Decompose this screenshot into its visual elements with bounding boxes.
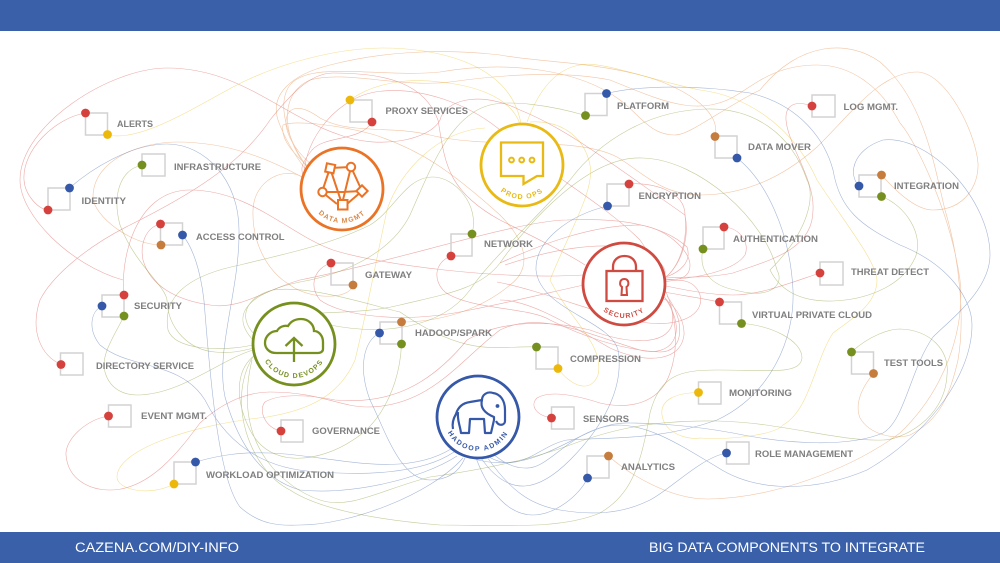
node: network [447, 230, 533, 260]
node: integration [855, 171, 959, 201]
hub: hadoop admin: HADOOP ADMIN [448, 430, 508, 451]
node: event management: EVENT MGMT. [141, 411, 207, 422]
node: virtual private cloud: VIRTUAL PRIVATE CLOUD [752, 310, 872, 321]
hub: cloud devops [252, 302, 336, 386]
node: role management [722, 442, 853, 464]
hub: data mgmt: DATA MGMT [318, 210, 364, 224]
node: gateway: GATEWAY [365, 270, 413, 281]
node: platform: PLATFORM [617, 101, 669, 112]
node: sensors [547, 407, 629, 429]
node: proxy services: PROXY SERVICES [386, 106, 468, 117]
node: identity: IDENTITY [82, 196, 127, 207]
orange connectors to data management hub [93, 48, 978, 499]
node: alerts [81, 109, 153, 139]
footer banner [0, 532, 1000, 563]
hub: security [582, 242, 666, 326]
footer banner: BIG DATA COMPONENTS TO INTEGRATE [649, 540, 925, 555]
node: integration: INTEGRATION [894, 181, 959, 192]
node: sensors: SENSORS [583, 414, 629, 425]
node: event management [104, 405, 207, 427]
node: compression: COMPRESSION [570, 354, 641, 365]
node: infrastructure [138, 154, 261, 176]
red connectors to security hub [20, 68, 820, 490]
node: hadoop/spark [375, 318, 492, 348]
node: workload optimization: WORKLOAD OPTIMIZATION [206, 470, 334, 481]
node: access control [156, 220, 285, 249]
node: workload optimization [170, 458, 334, 488]
node: infrastructure: INFRASTRUCTURE [174, 162, 261, 173]
node: log management: LOG MGMT. [844, 102, 898, 113]
node: proxy services [346, 96, 468, 126]
node: monitoring: MONITORING [729, 388, 792, 399]
node: security (left): SECURITY [134, 301, 183, 312]
node: security (left) [98, 291, 183, 320]
hub: hadoop admin [436, 374, 520, 460]
node: encryption [603, 180, 701, 210]
node: governance [277, 420, 380, 442]
node: platform [581, 89, 669, 120]
node: threat detect [816, 262, 929, 285]
olive connectors to cloud devops hub [104, 103, 947, 526]
top banner [0, 0, 1000, 31]
node: access control: ACCESS CONTROL [196, 232, 285, 243]
node: threat detect: THREAT DETECT [851, 267, 929, 278]
node: identity [44, 184, 127, 214]
node: governance: GOVERNANCE [312, 426, 380, 437]
node: compression [532, 343, 641, 373]
hub: data mgmt [300, 146, 384, 232]
node: test tools: TEST TOOLS [884, 358, 943, 369]
node: directory service [57, 353, 194, 375]
node: role management: ROLE MANAGEMENT [755, 449, 853, 460]
node: data mover [711, 132, 811, 162]
node: network: NETWORK [484, 239, 533, 250]
node: analytics [583, 452, 675, 482]
blue connectors to hadoop admin hub [70, 87, 990, 525]
node: log management [808, 95, 898, 117]
node: monitoring [694, 382, 792, 404]
node: directory service: DIRECTORY SERVICE [96, 361, 194, 372]
yellow connectors to prod ops hub [108, 48, 877, 491]
footer banner: CAZENA.COM/DIY-INFO [75, 540, 239, 555]
hub: prod ops: PROD OPS [500, 188, 542, 199]
node: encryption: ENCRYPTION [638, 191, 701, 202]
hub: security: SECURITY [604, 308, 642, 318]
node: gateway [327, 259, 413, 289]
node: hadoop/spark: HADOOP/SPARK [415, 328, 492, 339]
hub: prod ops [480, 122, 564, 208]
node: data mover: DATA MOVER [748, 142, 811, 153]
node: alerts: ALERTS [117, 119, 153, 130]
node: virtual private cloud [715, 298, 872, 328]
hub: cloud devops: CLOUD DEVOPS [266, 360, 322, 378]
node: authentication: AUTHENTICATION [733, 234, 818, 245]
node: test tools [847, 348, 943, 378]
node: authentication [699, 223, 818, 253]
node: analytics: ANALYTICS [621, 462, 675, 473]
